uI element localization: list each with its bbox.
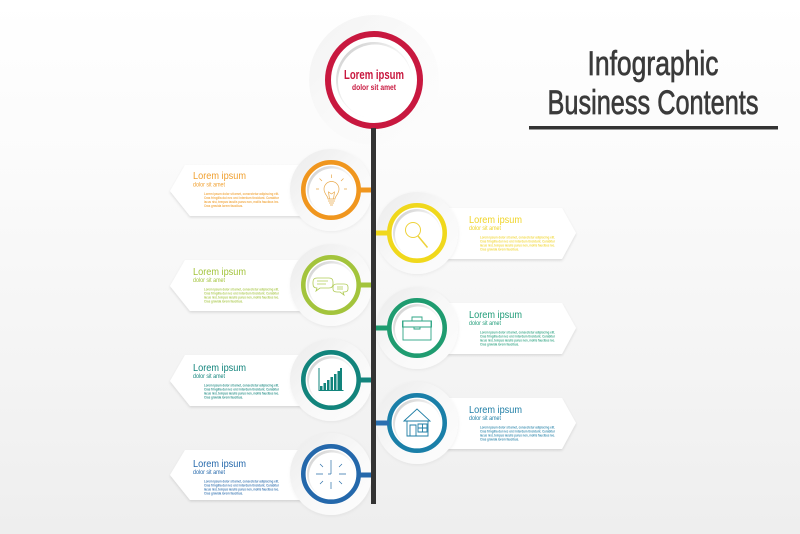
panel: step 1 orange	[170, 149, 372, 231]
main node	[309, 15, 439, 145]
text block: Cras gravida lorem faucibus.	[480, 342, 519, 346]
text block: Lorem ipsum	[469, 214, 522, 226]
text block: dolor sit amet	[469, 416, 501, 422]
connector	[376, 420, 389, 426]
text block: Cras gravida lorem faucibus.	[480, 248, 519, 252]
text block: Cras fringilla dui nec orci interdum tincidunt. Curabitur	[204, 388, 280, 392]
connector	[376, 326, 389, 330]
text block: Lorem ipsum dolor sit amet, consectetur adipiscing elit.	[204, 288, 279, 292]
node	[376, 192, 458, 274]
text block	[469, 214, 556, 252]
panel: step 6 ocean blue	[376, 382, 576, 464]
text block: Lorem ipsum dolor sit amet, consectetur adipiscing elit.	[204, 384, 279, 388]
node	[376, 382, 458, 464]
icon: bar chart	[318, 368, 344, 391]
text block: lacus nisi, tempus iaculis purus non, mollis faucibus leo.	[480, 244, 555, 248]
panel: step 5 teal	[170, 339, 372, 421]
text block: Cras fringilla dui nec orci interdum tincidunt. Curabitur	[480, 334, 556, 338]
text block: dolor sit amet	[193, 374, 225, 380]
main node label: dolor sit amet	[352, 82, 396, 92]
panel: step 4 green	[376, 287, 576, 369]
text block	[193, 266, 280, 304]
text block: Lorem ipsum dolor sit amet, consectetur adipiscing elit.	[480, 236, 555, 240]
text block: lacus nisi, tempus iaculis purus non, mollis faucibus leo.	[480, 338, 555, 342]
text block	[469, 404, 556, 442]
timeline spine	[371, 128, 376, 504]
text block: Lorem ipsum	[193, 362, 246, 374]
text block	[193, 458, 280, 496]
title underline	[529, 126, 778, 130]
text block: Lorem ipsum	[193, 170, 246, 182]
text block: Lorem ipsum	[193, 266, 246, 278]
node	[290, 433, 372, 515]
connector	[359, 472, 372, 478]
icon: light bulb	[316, 174, 347, 205]
text block: Lorem ipsum dolor sit amet, consectetur adipiscing elit.	[480, 426, 555, 430]
node	[290, 339, 372, 421]
text block	[193, 170, 280, 208]
text block: Cras gravida lorem faucibus.	[204, 396, 243, 400]
icon: briefcase	[402, 317, 432, 340]
text block	[193, 362, 280, 400]
text block: dolor sit amet	[193, 470, 225, 476]
connector	[359, 282, 372, 288]
icon: speech bubbles	[313, 278, 348, 295]
text block: Cras gravida lorem faucibus.	[480, 438, 519, 442]
node	[290, 149, 372, 231]
text block: Cras gravida lorem faucibus.	[204, 300, 243, 304]
title: Infographic	[588, 45, 718, 83]
connector	[359, 188, 372, 192]
text block: lacus nisi, tempus iaculis purus non, mollis faucibus leo.	[204, 200, 279, 204]
text block: Cras gravida lorem faucibus.	[204, 492, 243, 496]
text block: lacus nisi, tempus iaculis purus non, mollis faucibus leo.	[204, 296, 279, 300]
main node label: Lorem ipsum	[344, 67, 404, 82]
text block: Cras fringilla dui nec orci interdum tincidunt. Curabitur	[204, 292, 280, 296]
text block: dolor sit amet	[469, 226, 501, 232]
text block: Cras fringilla dui nec orci interdum tincidunt. Curabitur	[204, 196, 280, 200]
icon: house	[404, 409, 430, 436]
text block: Cras fringilla dui nec orci interdum tincidunt. Curabitur	[480, 240, 556, 244]
icon: clock	[316, 460, 346, 489]
panel: step 3 lime	[170, 244, 372, 326]
icon: magnifier	[406, 222, 428, 248]
text block: Lorem ipsum dolor sit amet, consectetur adipiscing elit.	[204, 480, 279, 484]
text block: lacus nisi, tempus iaculis purus non, mollis faucibus leo.	[204, 392, 279, 396]
panel: step 2 yellow	[376, 192, 576, 274]
text block: Cras gravida lorem faucibus.	[204, 204, 243, 208]
node	[376, 287, 458, 369]
text block: Lorem ipsum	[193, 458, 246, 470]
title	[548, 45, 758, 122]
panel: step 7 blue	[170, 433, 372, 515]
text block: Lorem ipsum	[469, 309, 522, 321]
text block: dolor sit amet	[193, 278, 225, 284]
text block: Cras fringilla dui nec orci interdum tincidunt. Curabitur	[204, 484, 280, 488]
text block: dolor sit amet	[469, 321, 501, 327]
text block: Cras fringilla dui nec orci interdum tincidunt. Curabitur	[480, 430, 556, 434]
connector	[376, 230, 389, 236]
text block: lacus nisi, tempus iaculis purus non, mollis faucibus leo.	[204, 488, 279, 492]
text block: lacus nisi, tempus iaculis purus non, mollis faucibus leo.	[480, 434, 555, 438]
text block: Lorem ipsum dolor sit amet, consectetur adipiscing elit.	[480, 330, 555, 334]
text block	[469, 309, 556, 346]
connector	[359, 378, 372, 382]
text block: dolor sit amet	[193, 182, 225, 188]
text block: Lorem ipsum dolor sit amet, consectetur adipiscing elit.	[204, 192, 279, 196]
text block: Lorem ipsum	[469, 404, 522, 416]
node	[290, 244, 372, 326]
main node label	[344, 67, 404, 92]
